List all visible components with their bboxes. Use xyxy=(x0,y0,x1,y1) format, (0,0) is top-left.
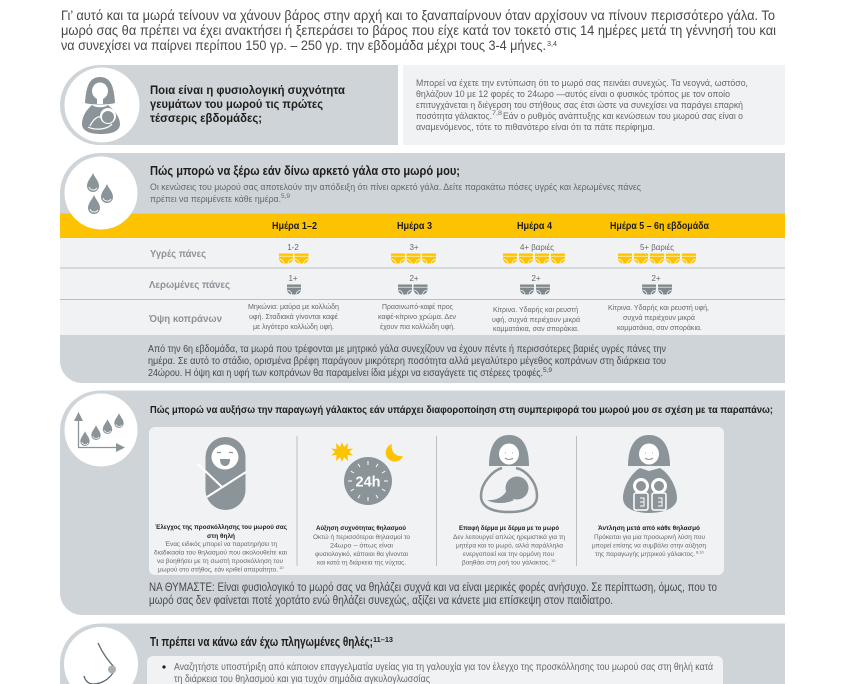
tip: latch check: να βοηθήσει με τη σωστή προσκόλληση του xyxy=(157,558,283,565)
row: wet nappies: 1-2 xyxy=(287,243,299,252)
row: stool appearance: με λιγότερο κολλώδη υφή. xyxy=(253,323,334,331)
row: wet nappies: Υγρές πάνες xyxy=(150,249,206,260)
row: stool appearance: Κίτρινα. Υδαρής και ρευστή xyxy=(493,306,578,314)
tip: latch check: στη θηλή xyxy=(207,532,235,540)
text: from week six xyxy=(148,343,666,379)
table header band: Ημέρα 3 xyxy=(397,221,432,232)
row: stool appearance: κομματάκια, σαν σποράκια. xyxy=(617,324,702,332)
table header band: Ημέρα 4 xyxy=(517,221,552,232)
intro text: Γι’ αυτό και τα μωρά τείνουν να χάνουν βάρος στην αρχή και το ξαναπαίρνουν όταν αρχίσουν να πίνουν περισσότερο γάλα. Το xyxy=(61,7,775,23)
row: soiled nappies xyxy=(149,274,672,294)
icon: swaddled baby xyxy=(198,437,246,510)
intro text: 3,4 xyxy=(547,39,557,48)
text: enough milk intro: πρέπει να περιμένετε κάθε ημέρα. xyxy=(150,194,281,205)
text: feeding frequency answer: ποσότητα γάλακτος. xyxy=(416,111,492,122)
icon: 24 hour clock with sun and moon: 24h xyxy=(356,474,380,490)
tip: pump after each feed: Άντληση μετά από κάθε θηλασμό xyxy=(598,524,700,532)
row: wet nappies: 3+ xyxy=(409,243,419,252)
text: feeding frequency answer: 7,8 xyxy=(492,111,503,117)
tip: skin to skin contact: Δεν λειτουργεί απλώς ηρεμιστικά για τη xyxy=(453,534,565,541)
intro text: μωρό σας θα πρέπει να έχει ανακτήσει ή ξεπεράσει το βάρος που είχε κατά τον τοκετό στις 14 ημέρες μετά τη γέννησή του και xyxy=(61,22,776,38)
card: sore nipple advice: Αναζητήστε υποστήριξη από κάποιον επαγγελματία υγείας για τη γαλουχία για τον έλεγχο της προσκόλλησης του μωρού σας στη θηλή κατά xyxy=(174,661,713,673)
row: stool appearance: υφή, συχνά περιέχουν μικρά xyxy=(492,316,580,324)
heading: feeding frequency xyxy=(150,83,346,125)
tip: increase feeding xyxy=(313,524,411,566)
panel: enough milk xyxy=(60,153,785,383)
tip: skin to skin contact: 10 xyxy=(551,558,556,563)
tip: pump after each feed: 8,10 xyxy=(696,550,705,554)
heading: enough milk: Πώς μπορώ να ξέρω εάν δίνω αρκετό γάλα στο μωρό μου; xyxy=(150,164,460,178)
icon: pumping xyxy=(623,435,677,513)
row: stool appearance: κομματάκια, σαν σποράκια. xyxy=(493,325,579,333)
tip: increase feeding: Οκτώ ή περισσότεροι θηλασμοί το xyxy=(313,534,411,541)
intro text: να συνεχίσει να παίρνει περίπου 150 γρ. – 250 γρ. την εβδομάδα μέχρι τους 3-4 μήνες. xyxy=(61,37,546,53)
icon: breastfeeding mother xyxy=(64,68,140,142)
text: reminder: ΝΑ ΘΥΜΑΣΤΕ: Είναι φυσιολογικό το μωρό σας να θηλάζει συχνά και να είναι μερικές φορές ανήσυχο. Σε περίπτωση, όμως, που το xyxy=(149,582,717,594)
heading: feeding frequency: Ποια είναι η φυσιολογική συχνότητα xyxy=(150,83,346,97)
heading: feeding frequency: τέσσερις εβδομάδες; xyxy=(150,111,262,125)
row: soiled nappies: 2+ xyxy=(409,274,419,283)
row: stool appearance: καφέ-κίτρινο χρώμα. Δεν xyxy=(378,313,457,321)
tip: increase feeding: και κατά τη διάρκεια της νύχτας. xyxy=(317,560,406,566)
tip: latch check: Ένας ειδικός μπορεί να παρατηρήσει τη xyxy=(164,541,277,548)
icon: 24 hour clock with sun and moon xyxy=(331,442,403,505)
icon: milk drops xyxy=(64,156,138,230)
text: enough milk intro: Οι κενώσεις του μωρού σας αποτελούν την απόδειξη ότι πίνει αρκετό γάλα. Δείτε παρακάτω πόσες υγρές και λερωμένες πάνες xyxy=(150,182,641,193)
row: wet nappies: 4+ βαριές xyxy=(520,243,554,252)
row: stool appearance: υφή. Σταδιακά γίνονται καφέ xyxy=(249,313,338,321)
text: from week six: ημέρα. Σε αυτό το στάδιο, ορισμένα βρέφη παράγουν μικρότερη ποσότητα αλλά μεγαλύτερο μέγεθος κοπράνων στη διάρκεια του xyxy=(148,355,666,367)
tip: increase feeding: 24ωρο – όπως είναι xyxy=(330,542,394,550)
text: feeding frequency answer xyxy=(416,78,748,133)
panel: increase milk production xyxy=(60,390,785,615)
tip: pump after each feed: μπορεί επίσης να συμβάλει στην αύξηση xyxy=(592,542,706,550)
tip: skin to skin contact: ενεργοποιεί και την ορμόνη που xyxy=(463,551,554,558)
row: soiled nappies: 2+ xyxy=(651,274,661,283)
card: four tips xyxy=(149,427,724,575)
tip: latch check: Έλεγχος της προσκόλλησης του μωρού σας xyxy=(155,523,288,531)
tip: increase feeding: Αύξηση συχνότητας θηλασμού xyxy=(316,524,406,532)
row: soiled nappies: 1+ xyxy=(288,274,298,283)
text: feeding frequency answer: επιτυγχάνεται η διέγερση του στήθους σας έτσι ώστε να συνεχίσει να παράγει επαρκή xyxy=(416,100,743,111)
tip: increase feeding: φυσιολογικό, κάποιοι θα γίνονται xyxy=(315,551,409,558)
heading: increase production: Πώς μπορώ να αυξήσω την παραγωγή γάλακτος εάν υπάρχει διαφοροποίηση στη συμπεριφορά του μωρού μου σε σχέση με τα παραπάνω; xyxy=(150,404,773,416)
table header band xyxy=(60,214,785,238)
text: enough milk intro: 5,9 xyxy=(281,194,291,200)
icon: skin to skin xyxy=(481,435,537,512)
icon: rising milk chart xyxy=(64,394,138,466)
text: from week six: Από την 6η εβδομάδα, τα μωρά που τρέφονται με μητρικό γάλα συνεχίζουν να έχουν πέντε ή περισσότερες βαριές υγρές πάνες την xyxy=(148,343,666,355)
card: sore nipple advice xyxy=(147,656,723,684)
row: soiled nappies: 2+ xyxy=(531,274,541,283)
text: enough milk intro xyxy=(150,182,641,205)
row: stool appearance: Όψη κοπράνων xyxy=(148,314,222,325)
intro text xyxy=(61,7,776,53)
row: stool appearance: έχουν πια κολλώδη υφή. xyxy=(380,323,455,331)
text: feeding frequency answer: Μπορεί να έχετε την εντύπωση ότι το μωρό σας πεινάει συνεχώς. Τα νεογνά, ωστόσο, xyxy=(416,78,748,89)
row: soiled nappies: Λερωμένες πάνες xyxy=(149,280,230,291)
row: stool appearance: Κίτρινα. Υδαρής και ρευστή υφή, xyxy=(608,304,709,312)
row: wet nappies xyxy=(150,243,696,264)
tip: latch check xyxy=(154,523,288,574)
tip: latch check: μωρού στο στήθος, εάν κριθεί απαραίτητο. xyxy=(158,566,278,574)
icon: breast xyxy=(64,627,138,684)
text: reminder: μωρό σας δεν φαίνεται ποτέ χορτάτο ενώ θηλάζει συνεχώς, αξίζει να κάνετε μια επίσκεψη στον παιδίατρο. xyxy=(149,595,613,607)
heading: sore nipples: Τι πρέπει να κάνω εάν έχω πληγωμένες θηλές; xyxy=(150,635,373,649)
heading: feeding frequency: γευμάτων του μωρού τις πρώτες xyxy=(150,97,323,111)
row: wet nappies: 5+ βαριές xyxy=(640,243,674,252)
tip: latch check: διαδικασία του θηλασμού που ακολουθείτε και xyxy=(154,550,288,556)
text: from week six: 5,9 xyxy=(543,368,553,374)
row: stool appearance: Πρασινωπό-καφέ προς xyxy=(382,303,454,311)
row: stool appearance: Μηκώνια: μαύρα με κολλώδη xyxy=(248,303,339,311)
row: stool appearance: συχνά περιέχουν μικρά xyxy=(623,314,695,322)
table header band: Ημέρα 1–2 xyxy=(272,221,317,232)
tip: skin to skin contact: μητέρα και το μωρό, αλλά παράλληλα xyxy=(456,542,564,550)
text: feeding frequency answer: θηλάζουν 10 με 12 φορές το 24ωρο —αυτός είναι ο φυσικός τρόπος με τον οποίο xyxy=(416,89,730,100)
tip: pump after each feed xyxy=(592,524,706,558)
table header band: Ημέρα 5 – 6η εβδομάδα xyxy=(610,221,710,232)
tip: pump after each feed: της παραγωγής μητρικού γάλακτος. xyxy=(595,551,695,558)
tip: skin to skin contact: Επαφή δέρμα με δέρμα με το μωρό xyxy=(459,525,559,532)
text: reminder xyxy=(149,582,717,607)
text: feeding frequency answer: αναμενόμενος, τότε το πιθανότερο είναι ότι τα πάτε περίφημα. xyxy=(416,122,655,133)
text: feeding frequency answer: Εάν ο ρυθμός ανάπτυξης και κενώσεων του μωρού σας είναι ο xyxy=(503,111,743,122)
heading: sore nipples: 11–13 xyxy=(373,635,393,644)
tip: skin to skin contact xyxy=(453,525,565,566)
tip: skin to skin contact: βοηθάει στη ροή του γάλακτος. xyxy=(462,560,550,566)
tip: pump after each feed: Πρόκειται για μια προσωρινή λύση που xyxy=(594,534,705,541)
panel: feeding frequency xyxy=(60,65,785,145)
tip: latch check: 10 xyxy=(279,565,284,570)
panel: sore nipples xyxy=(60,624,785,684)
text: from week six: 24ώρου. Η όψη και η υφή των κοπράνων θα παραμείνει ίδια μέχρι να εισαγάγετε τις στέρεες τροφές. xyxy=(148,367,543,379)
row: stool appearance xyxy=(148,303,709,333)
